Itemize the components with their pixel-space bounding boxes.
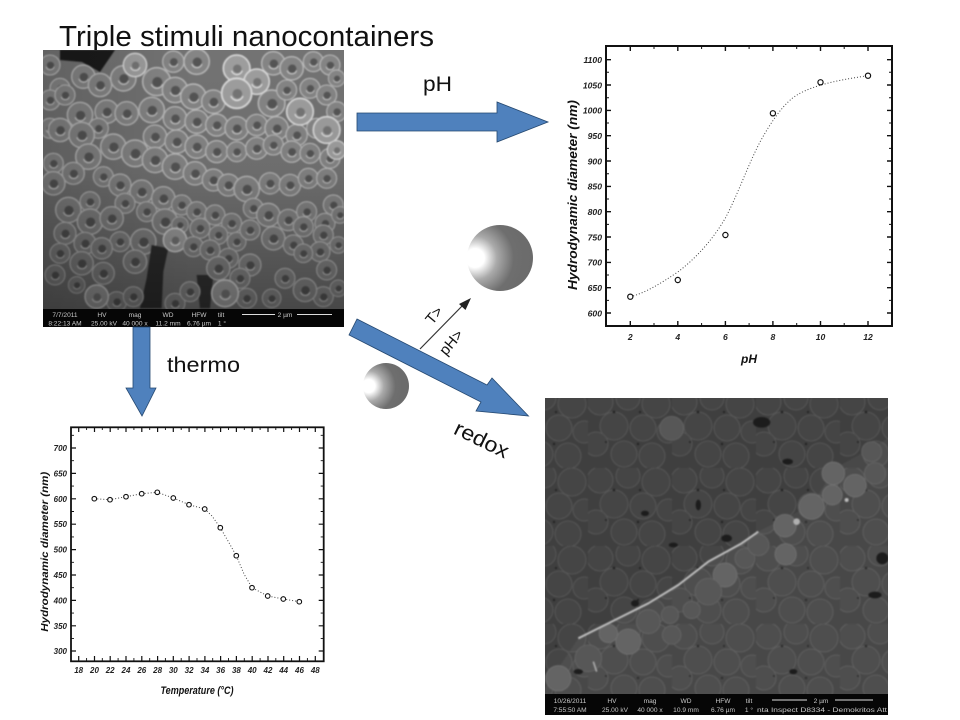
y axis tick labels — [583, 55, 602, 318]
y axis tick labels — [53, 444, 68, 656]
arrow: redox — [349, 319, 528, 416]
SEM info bar: 2 µm — [278, 312, 293, 319]
y axis tick labels: 550 — [54, 520, 68, 529]
x axis tick labels: 22 — [105, 666, 115, 675]
y axis tick labels: 700 — [588, 258, 602, 268]
y axis tick labels: 350 — [54, 622, 68, 631]
panel: SEM micrograph of nanocontainers — [40, 49, 348, 327]
SEM info bar: WD — [680, 698, 692, 705]
SEM info bar: 10.9 mm — [673, 707, 699, 714]
x axis tick labels: 30 — [169, 666, 178, 675]
data points — [628, 73, 871, 299]
y axis tick labels: 750 — [588, 232, 602, 242]
x axis tick labels: 46 — [294, 666, 304, 675]
x axis tick labels: 8 — [771, 332, 776, 342]
chart: hydrodynamic diameter vs temperature — [39, 427, 324, 697]
SEM info bar: 8:22:13 AM — [48, 320, 82, 328]
x axis tick labels: 34 — [200, 666, 210, 675]
y axis tick labels: 1000 — [583, 106, 602, 116]
label: pH: pH — [423, 73, 452, 96]
SEM info bar: 40 000 x — [122, 320, 148, 328]
x axis tick labels: 28 — [152, 666, 163, 675]
x axis tick labels: 10 — [816, 332, 825, 342]
SEM info bar: 2 µm — [814, 698, 829, 705]
y axis title: Hydrodynamic diameter (nm) — [39, 471, 51, 632]
x axis tick labels: 18 — [74, 666, 84, 675]
x axis tick labels: 2 — [627, 332, 633, 342]
y axis tick labels: 300 — [54, 647, 68, 656]
x axis tick labels: 44 — [278, 666, 289, 675]
y axis tick labels: 600 — [588, 308, 602, 318]
x axis tick labels: 36 — [216, 666, 226, 675]
arrow: thermo — [126, 327, 156, 416]
SEM info bar: HFW — [191, 312, 207, 319]
panel: SEM micrograph after redox — [540, 393, 893, 715]
y axis tick labels: 650 — [54, 469, 68, 478]
SEM info bar: HV — [97, 312, 107, 319]
SEM info bar: mag — [644, 698, 657, 705]
x axis tick labels: 12 — [863, 332, 873, 342]
SEM info bar: WD — [162, 312, 174, 319]
SEM info bar: 6.76 µm — [711, 707, 735, 714]
x axis tick labels — [74, 666, 320, 675]
SEM info bar: 7:55:50 AM — [553, 707, 587, 714]
x axis tick labels: 20 — [89, 666, 99, 675]
label: pH>: pH> — [436, 326, 467, 359]
x axis title: Temperature (°C) — [160, 685, 234, 697]
x axis tick labels: 4 — [674, 332, 680, 342]
title: Triple stimuli nanocontainers — [59, 21, 434, 53]
SEM info bar: HV — [607, 698, 617, 705]
fitted curve — [94, 492, 299, 602]
y axis tick labels: 1100 — [584, 55, 602, 65]
y axis tick labels: 1050 — [583, 80, 602, 90]
x axis tick labels — [627, 332, 873, 342]
SEM info bar — [43, 309, 344, 328]
SEM info bar: mag — [129, 312, 142, 319]
icon: large nanocontainer sphere — [467, 225, 533, 291]
arrow: swelling direction — [420, 298, 471, 349]
x axis title: pH — [740, 352, 757, 366]
arrow: pH — [357, 102, 548, 142]
y axis title: Hydrodynamic diameter (nm) — [566, 100, 580, 290]
y axis tick labels: 600 — [54, 495, 68, 504]
y axis tick labels: 500 — [54, 546, 68, 555]
SEM info bar: 10/26/2011 — [554, 698, 587, 705]
label: thermo: thermo — [167, 354, 240, 377]
SEM info bar: tilt — [218, 312, 224, 319]
SEM info bar — [545, 694, 888, 715]
chart: hydrodynamic diameter vs pH — [566, 46, 892, 366]
y axis tick labels: 650 — [588, 283, 602, 293]
x axis tick labels: 42 — [263, 666, 273, 675]
x axis tick labels: 24 — [121, 666, 131, 675]
data points — [92, 490, 302, 604]
SEM info bar: nta Inspect D8334 - Demokritos Att — [757, 707, 887, 714]
label: T>: T> — [422, 303, 447, 328]
x axis tick labels: 32 — [185, 666, 194, 675]
x axis tick labels: 48 — [310, 666, 320, 675]
icon: small nanocontainer sphere — [363, 363, 409, 409]
y axis tick labels: 850 — [588, 182, 602, 192]
SEM info bar: 11.2 mm — [155, 320, 181, 328]
SEM info bar: tilt — [746, 698, 752, 705]
x axis tick labels: 38 — [232, 666, 241, 675]
x axis tick labels: 40 — [247, 666, 257, 675]
SEM info bar: 6.76 µm — [187, 320, 211, 328]
y axis tick labels: 950 — [588, 131, 602, 141]
y axis tick labels: 800 — [588, 207, 602, 217]
y axis tick labels: 700 — [54, 444, 68, 453]
SEM info bar: 40 000 x — [637, 707, 663, 714]
SEM info bar: 7/7/2011 — [52, 312, 78, 319]
y axis tick labels: 400 — [53, 596, 68, 605]
x axis tick labels: 26 — [136, 666, 147, 675]
x axis tick labels: 6 — [723, 332, 728, 342]
SEM info bar: 25.00 kV — [602, 707, 629, 714]
SEM info bar: 25.00 kV — [91, 320, 118, 328]
SEM info bar: HFW — [715, 698, 731, 705]
SEM info bar: 1 ° — [745, 706, 753, 714]
y axis tick labels: 450 — [53, 571, 68, 580]
fitted curve — [630, 76, 868, 297]
SEM info bar: 1 ° — [218, 320, 226, 328]
label: redox: redox — [450, 417, 513, 463]
y axis tick labels: 900 — [588, 156, 602, 166]
